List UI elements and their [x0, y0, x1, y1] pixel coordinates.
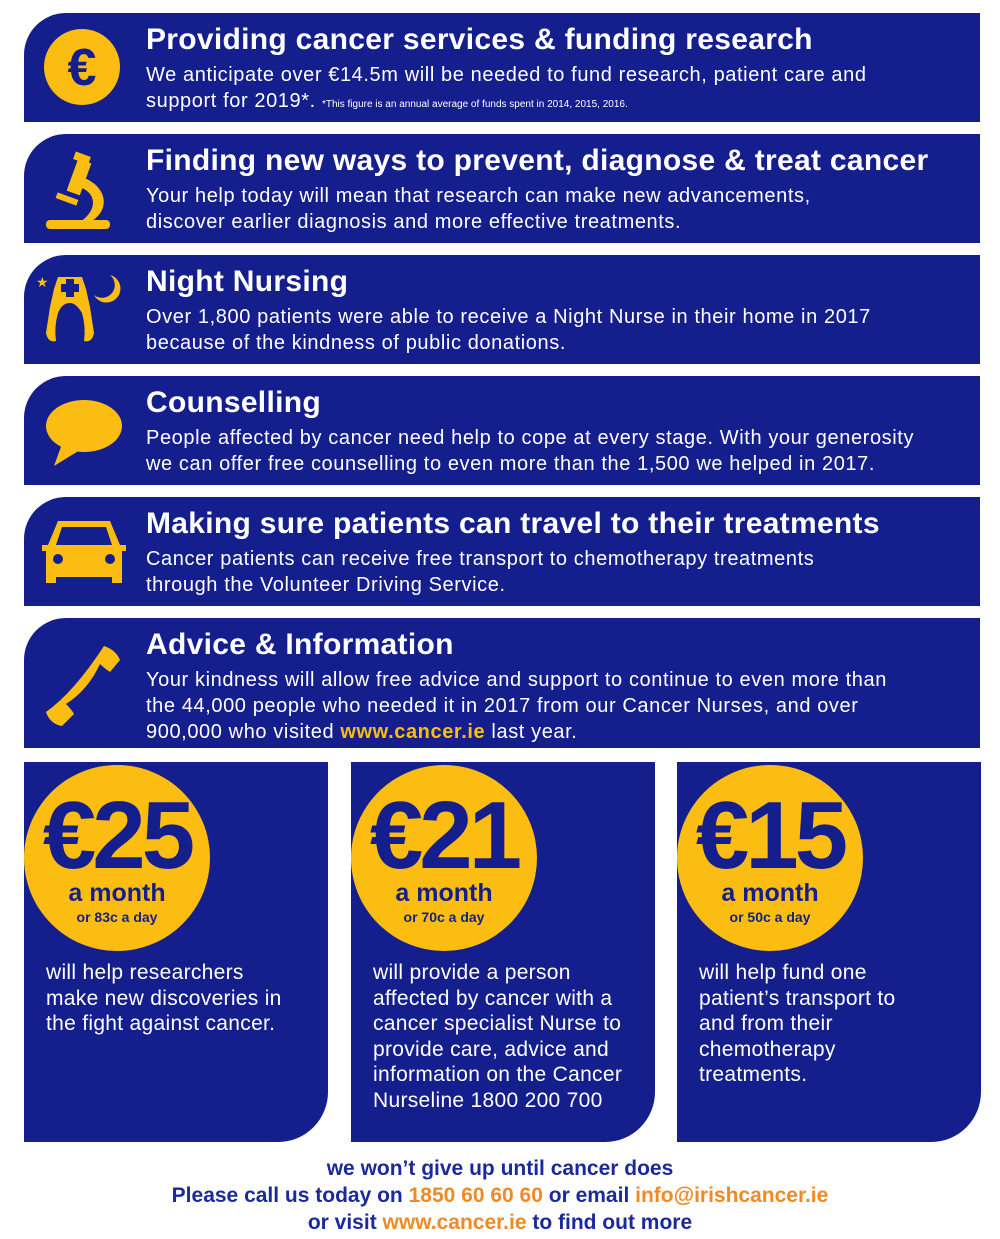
circle: €15 [677, 765, 863, 951]
icon: speech bubble [46, 400, 122, 466]
panel: funding [24, 13, 980, 122]
circle: €25: a month [68, 879, 166, 907]
text: treatments. [699, 1063, 807, 1086]
text: discover earlier diagnosis and more effective treatments. [146, 211, 681, 233]
circle: €21: €21 [370, 782, 518, 889]
text [699, 961, 896, 1086]
text [146, 306, 871, 354]
text [373, 961, 622, 1112]
icon: euro coin [44, 29, 120, 105]
text: will help fund one [699, 961, 867, 984]
circle: €21 [351, 765, 537, 951]
circle: €15: €15 [696, 782, 844, 889]
text: Cancer patients can receive free transport to chemotherapy treatments [146, 548, 814, 570]
text: the fight against cancer. [46, 1012, 275, 1035]
text: make new discoveries in [46, 987, 282, 1010]
text: We anticipate over €14.5m will be needed to fund research, patient care and [146, 64, 867, 86]
heading: Providing cancer services & funding research [146, 23, 813, 56]
heading: Making sure patients can travel to their treatments [146, 507, 880, 540]
text: People affected by cancer need help to cope at every stage. With your generosity [146, 427, 914, 449]
panel: night nursing [24, 255, 980, 364]
heading: Finding new ways to prevent, diagnose & treat cancer [146, 144, 928, 177]
panel: research [24, 134, 980, 243]
text: will help researchers [46, 961, 244, 984]
text: information on the Cancer [373, 1063, 622, 1086]
circle: €21: or 70c a day [404, 909, 484, 925]
panel: transport [24, 497, 980, 606]
text: chemotherapy [699, 1038, 836, 1061]
text: patient’s transport to [699, 987, 896, 1010]
text: because of the kindness of public donations. [146, 332, 566, 354]
icon: microscope [46, 152, 110, 229]
text [146, 64, 867, 112]
panel: advice [24, 618, 980, 748]
text: will provide a person [373, 961, 571, 984]
heading: Counselling [146, 386, 321, 419]
text: through the Volunteer Driving Service. [146, 574, 506, 596]
circle: €15: or 50c a day [730, 909, 810, 925]
text: 900,000 who visited www.cancer.ie last year. [146, 721, 577, 743]
footer text: Please call us today on 1850 60 60 60 or email info@irishcancer.ie [172, 1184, 828, 1207]
text [146, 669, 887, 743]
footer text: we won’t give up until cancer does [327, 1157, 673, 1180]
text: Your help today will mean that research can make new advancements, [146, 185, 811, 207]
icon: car [42, 521, 126, 583]
text: and from their [699, 1012, 833, 1035]
text [146, 427, 914, 475]
circle: €25: or 83c a day [77, 909, 157, 925]
text [146, 548, 814, 596]
icon: nurse [36, 274, 120, 342]
text [146, 185, 811, 233]
text [46, 961, 282, 1035]
footer text [172, 1157, 828, 1234]
panel: counselling [24, 376, 980, 485]
text: Nurseline 1800 200 700 [373, 1089, 603, 1112]
icon: euro coin: € [68, 39, 96, 97]
circle: €15: a month [721, 879, 819, 907]
text: provide care, advice and [373, 1038, 609, 1061]
text: support for 2019*. *This figure is an annual average of funds spent in 2014, 2015, 2016. [146, 90, 628, 112]
icon: nurse: ★ [36, 274, 49, 290]
card: €25 [24, 762, 328, 1142]
circle: €25: €25 [43, 782, 191, 889]
footer text: or visit www.cancer.ie to find out more [308, 1211, 692, 1234]
text: Over 1,800 patients were able to receive a Night Nurse in their home in 2017 [146, 306, 871, 328]
text: we can offer free counselling to even more than the 1,500 we helped in 2017. [146, 453, 875, 475]
circle: €21: a month [395, 879, 493, 907]
heading: Advice & Information [146, 628, 454, 661]
circle: €25 [24, 765, 210, 951]
heading: Night Nursing [146, 265, 348, 298]
icon: phone [46, 646, 120, 726]
text: Your kindness will allow free advice and support to continue to even more than [146, 669, 887, 691]
text: cancer specialist Nurse to [373, 1012, 621, 1035]
card: €21 [351, 762, 655, 1142]
text: the 44,000 people who needed it in 2017 from our Cancer Nurses, and over [146, 695, 859, 717]
text: affected by cancer with a [373, 987, 612, 1010]
card: €15 [677, 762, 981, 1142]
